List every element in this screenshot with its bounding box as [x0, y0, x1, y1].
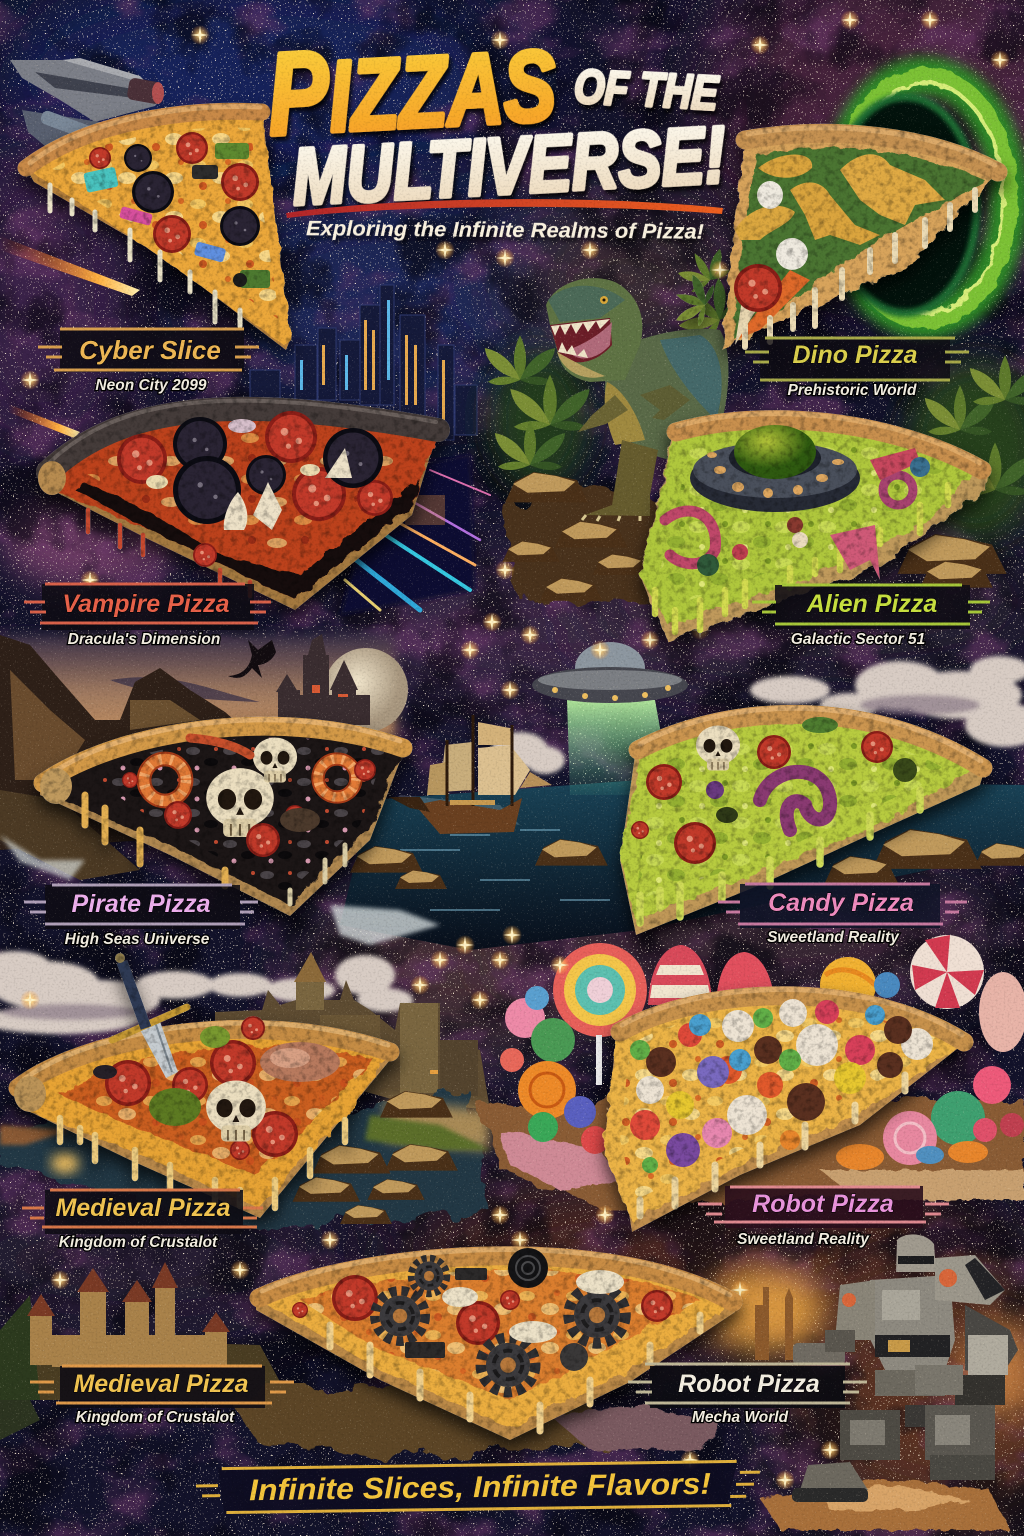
- label: Medieval Pizza (lower): [30, 1366, 294, 1426]
- green portal: [833, 74, 1011, 322]
- icon: sword: [112, 953, 187, 1078]
- title: Exploring the Infinite Realms of Pizza!: [306, 217, 704, 244]
- label: Medieval Pizza (lower): Kingdom of Crustalot: [76, 1409, 235, 1426]
- label: Cyber Slice: Cyber Slice: [79, 335, 221, 365]
- title: OF THE: [573, 60, 721, 121]
- pizza: green candy label slice: [620, 708, 985, 935]
- pizza: robot gears: [256, 1248, 735, 1440]
- label: Medieval Pizza (lower): Medieval Pizza: [73, 1370, 249, 1398]
- pizza: cyber slice: [26, 107, 292, 350]
- label: Robot Pizza (Sweetland): [698, 1186, 949, 1248]
- title: [264, 14, 728, 244]
- banner: footer tagline: [196, 1460, 760, 1514]
- label: Pirate Pizza: High Seas Universe: [65, 931, 210, 948]
- candy land: [480, 935, 1024, 1205]
- label: Candy Pizza: Candy Pizza: [768, 889, 914, 917]
- label: Candy Pizza: Sweetland Reality: [767, 929, 900, 946]
- label: Dino Pizza: [745, 337, 969, 399]
- label: Medieval Pizza (Crustalot): Kingdom of Crustalot: [59, 1234, 218, 1251]
- label: Vampire Pizza: [24, 584, 271, 648]
- label: Cyber Slice: [38, 328, 259, 394]
- icon: dragon silhouette: [228, 640, 276, 678]
- label: Robot Pizza (Sweetland): Robot Pizza: [752, 1190, 894, 1218]
- pizza: dino: [668, 128, 998, 350]
- ocean: [330, 780, 1024, 950]
- icon: UFO with tractor beam: [532, 642, 688, 795]
- pizza: candy-topped: [603, 990, 966, 1232]
- label: Robot Pizza (Sweetland): Sweetland Reality: [737, 1231, 870, 1248]
- label: Pirate Pizza: [24, 885, 258, 948]
- icon: pirate ship: [389, 715, 552, 834]
- dusk sky, mountains and moon: [0, 635, 408, 880]
- title: PIZZAS: [264, 14, 559, 159]
- pizza: pirate: [40, 720, 405, 916]
- banner: footer tagline: Infinite Slices, Infinite Flavors!: [249, 1468, 711, 1507]
- label: Robot Pizza (Mecha World): Mecha World: [692, 1409, 789, 1426]
- label: Robot Pizza (Mecha World): [628, 1364, 867, 1426]
- label: Alien Pizza: [752, 585, 990, 648]
- label: Dino Pizza: Prehistoric World: [788, 382, 917, 399]
- label: Pirate Pizza: Pirate Pizza: [72, 890, 211, 918]
- title: MULTIVERSE!: [290, 110, 728, 221]
- label: Candy Pizza: [718, 884, 967, 946]
- label: Alien Pizza: Alien Pizza: [806, 590, 937, 618]
- jungle and rocks: [485, 241, 1024, 605]
- illustration: giant robot: [792, 1234, 1018, 1502]
- illustration: T. rex: [546, 278, 728, 521]
- pizza: alien: [640, 414, 986, 642]
- icon: spaceship: [10, 58, 165, 146]
- medieval fortress: [215, 952, 490, 1110]
- lower castle and hills: [0, 1262, 1024, 1530]
- pizza: medieval: [14, 953, 392, 1218]
- cracked rocky ground: [0, 1090, 490, 1230]
- pizza: vampire: [38, 401, 438, 610]
- icon: castle on hill: [276, 634, 370, 726]
- label: Medieval Pizza (Crustalot): Medieval Pizza: [55, 1194, 231, 1222]
- label: Alien Pizza: Galactic Sector 51: [791, 631, 925, 648]
- meteors: [0, 236, 140, 438]
- label: Cyber Slice: Neon City 2099: [95, 377, 207, 394]
- label: Robot Pizza (Mecha World): Robot Pizza: [678, 1370, 820, 1398]
- label: Dino Pizza: Dino Pizza: [792, 341, 918, 369]
- label: Medieval Pizza (Crustalot): [22, 1190, 263, 1251]
- label: Vampire Pizza: Dracula's Dimension: [68, 631, 220, 648]
- label: Vampire Pizza: Vampire Pizza: [62, 590, 230, 618]
- clouds: [0, 656, 1024, 1034]
- scenery: space city, neon streaks: [250, 285, 490, 615]
